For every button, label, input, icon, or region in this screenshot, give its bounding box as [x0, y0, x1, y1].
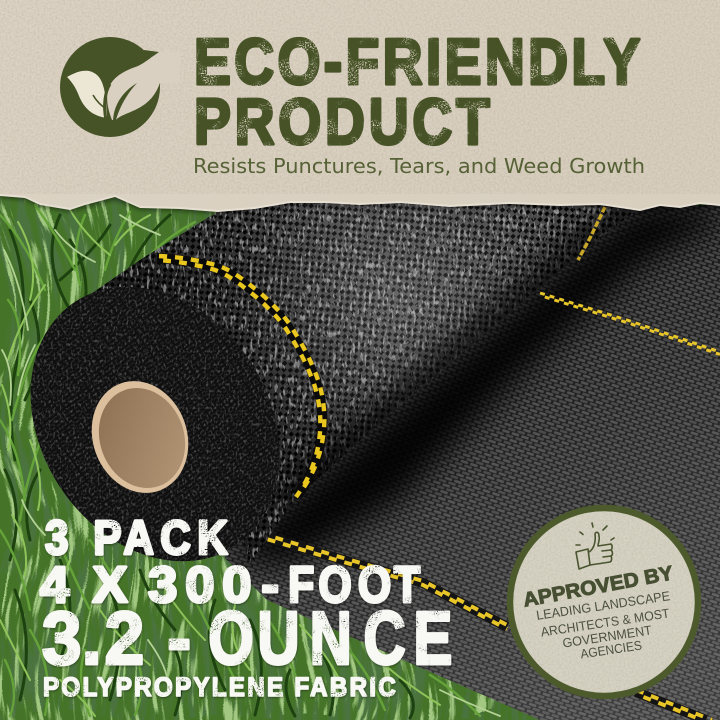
product specs: 4 X 300-	[40, 556, 279, 613]
subtitle: Resists Punctures, Tears, and Weed Growth	[193, 154, 645, 178]
product specs: 3 PACK	[45, 510, 228, 565]
yellow stripe: upper flat	[540, 293, 720, 354]
approval description: GOVERNMENT	[561, 622, 653, 651]
approval description	[535, 588, 671, 661]
icon: thumbs up	[576, 523, 614, 569]
product specs	[40, 510, 452, 702]
approval description: ARCHITECTS & MOST	[540, 605, 671, 640]
torn paper header	[0, 0, 720, 214]
fabric sheet on the ground	[225, 205, 720, 720]
leaf	[67, 71, 107, 118]
title	[194, 25, 640, 158]
title: PRODUCT	[194, 85, 490, 158]
product specs: POLYPROPYLENE FABRIC	[43, 673, 396, 702]
approved by: APPROVED BY	[521, 562, 676, 612]
product specs: 3.2 -	[42, 597, 191, 680]
approval description: LEADING LANDSCAPE	[535, 588, 671, 623]
yellow stripe: lower flat	[260, 533, 712, 720]
fabric roll	[30, 203, 635, 565]
title: ECO-FRIENDLY	[194, 25, 640, 98]
roll end face	[30, 286, 280, 562]
product specs: OUNCE	[208, 597, 452, 681]
cardboard core	[76, 367, 204, 507]
approval badge	[510, 508, 700, 698]
approval description: AGENCIES	[579, 637, 643, 661]
roll body	[92, 203, 635, 565]
yellow stripe on roll	[155, 207, 605, 497]
logo: eco leaf circle	[60, 37, 180, 137]
product specs: FOOT	[288, 555, 420, 613]
